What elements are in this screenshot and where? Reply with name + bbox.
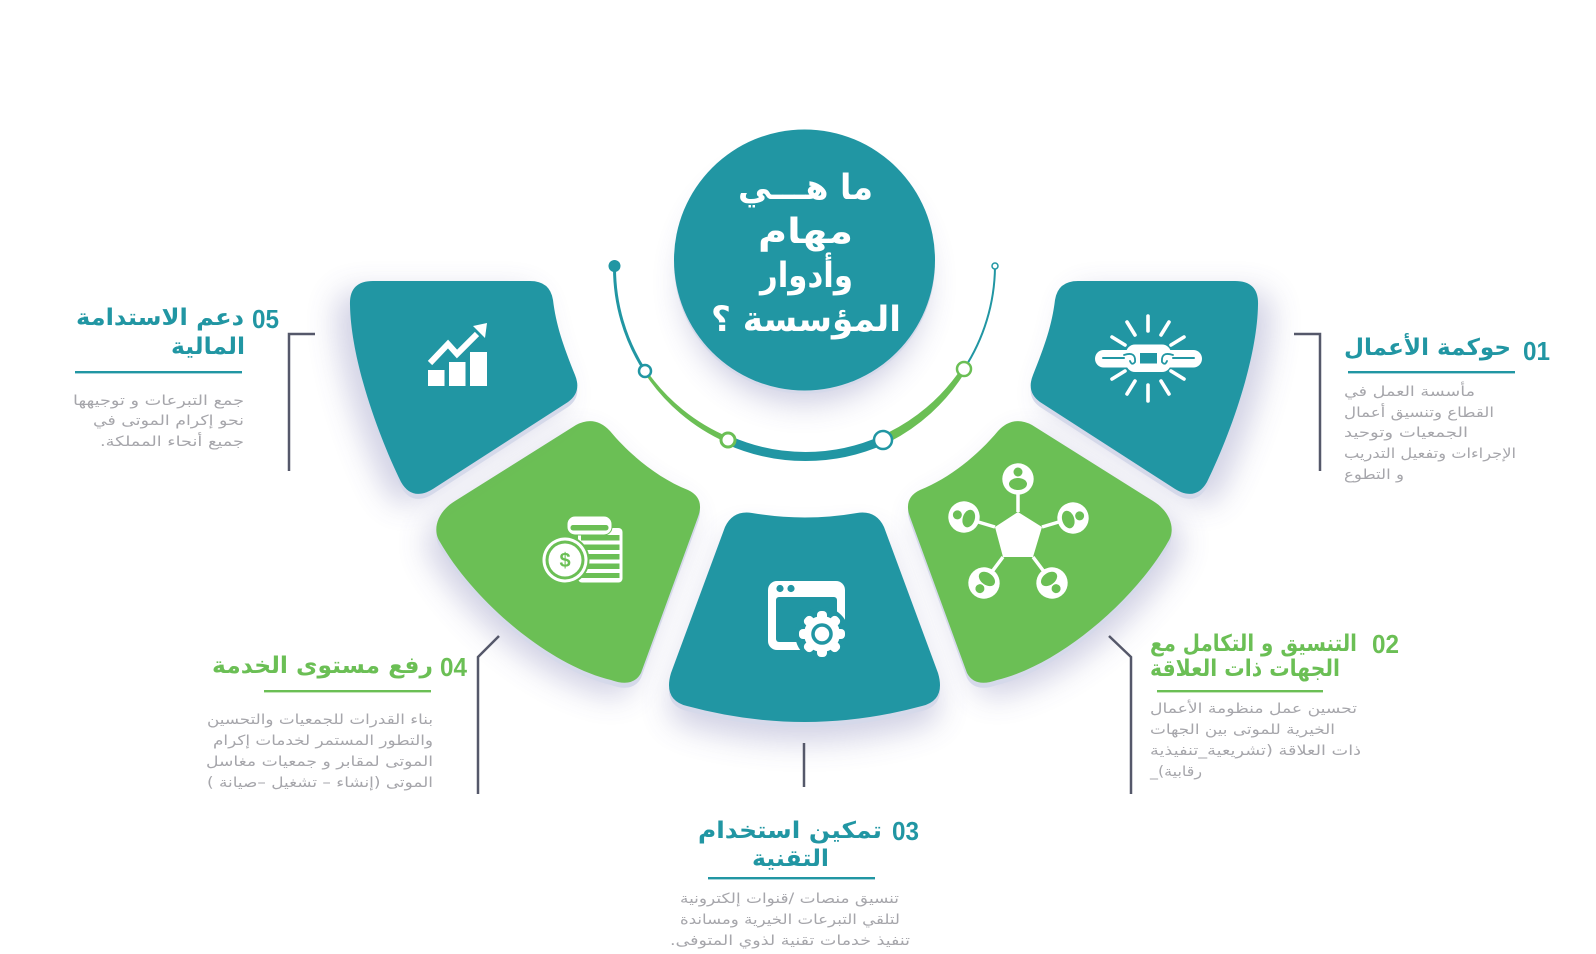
connector 03 — [803, 743, 805, 787]
underline 05 — [75, 371, 242, 373]
arc with nodes — [608, 260, 998, 457]
description 03: تنسيق منصات /قنوات إلكترونية — [680, 891, 899, 907]
icon: coins with dollar: $ — [559, 550, 571, 572]
panel: teal shape 01 — [1031, 281, 1272, 504]
title 01: حوكمة الأعمال — [1344, 332, 1511, 361]
heading: central question: المؤسسة ؟ — [711, 300, 901, 340]
panel: green shape 02 — [908, 421, 1182, 697]
number 01: 01 — [1523, 336, 1550, 366]
text block 04 — [206, 652, 468, 791]
description 05: جميع أنحاء المملكة. — [100, 432, 244, 450]
title 02: الجهات ذات العلاقة — [1150, 656, 1340, 682]
title 04: رفع مستوى الخدمة — [212, 653, 433, 679]
underline 04 — [264, 690, 431, 692]
icon: network of people — [944, 463, 1093, 605]
text block 05 — [73, 304, 279, 450]
icon: window with gear — [768, 581, 849, 661]
title 05: دعم الاستدامة — [76, 305, 244, 331]
heading: central question: وأدوار — [758, 252, 853, 296]
description 04: الموتى لمقابر و جمعيات مغاسل — [206, 754, 433, 770]
description 04: والتطور المستمر لخدمات إكرام — [213, 733, 433, 749]
description 01: مأسسة العمل في — [1344, 381, 1475, 400]
title 02: التنسيق و التكامل مع — [1150, 631, 1357, 657]
panel: green shape 04 — [426, 421, 700, 697]
description 01: و التطوع — [1344, 467, 1404, 483]
description 05 — [73, 393, 244, 450]
panel: teal shape 03 — [669, 513, 940, 742]
description 02 — [1149, 699, 1361, 780]
title 03 — [698, 818, 882, 872]
connector 05 — [289, 334, 315, 471]
description 03: تنفيذ خدمات تقنية لذوي المتوفى. — [670, 933, 910, 949]
text block 03 — [670, 816, 919, 949]
description 04: بناء القدرات للجمعيات والتحسين — [207, 712, 433, 728]
description 01: الجمعيات وتوحيد — [1344, 425, 1468, 441]
description 03 — [670, 891, 910, 949]
title 03: تمكين استخدام — [698, 818, 882, 844]
description 01: الإجراءات وتفعيل التدريب — [1344, 446, 1516, 462]
heading: central question: ما هـــي — [738, 168, 873, 208]
connector 02 — [1109, 636, 1131, 794]
description 02: الخيرية للموتى بين الجهات — [1150, 722, 1335, 738]
heading: central question: مهام — [758, 212, 853, 252]
text block 02 — [1149, 629, 1399, 780]
icon: broken chain — [1095, 316, 1202, 401]
underline 02 — [1157, 690, 1323, 692]
icon: rising chart — [428, 323, 487, 386]
title 03: التقنية — [752, 846, 829, 872]
number 05: 05 — [252, 304, 279, 334]
number 04: 04 — [440, 652, 468, 682]
connector 01 — [1294, 334, 1320, 471]
description 02: تحسين عمل منظومة الأعمال — [1150, 699, 1357, 717]
title 02 — [1150, 631, 1357, 682]
description 01 — [1344, 381, 1516, 483]
description 01: القطاع وتنسيق أعمال — [1344, 403, 1494, 421]
panel: teal shape 05 — [336, 281, 577, 504]
heading: central question — [711, 168, 901, 340]
description 05: جمع التبرعات و توجيهها — [73, 393, 244, 409]
description 02: ذات العلاقة (تشريعية_تنفيذية — [1150, 743, 1361, 759]
icon: coins with dollar — [540, 516, 622, 584]
description 04: الموتى (إنشاء – تشغيل –صيانة ) — [207, 775, 433, 791]
description 02: رقابية)_ — [1149, 764, 1202, 780]
title 05 — [76, 305, 245, 360]
description 03: لتلقي التبرعات الخيرية ومساندة — [680, 912, 900, 928]
underline 03 — [708, 877, 875, 879]
description 05: نحو إكرام الموتى في — [93, 413, 244, 429]
number 02: 02 — [1372, 629, 1399, 659]
title 05: المالية — [171, 334, 245, 360]
underline 01 — [1348, 371, 1515, 373]
panel: central circle — [674, 130, 935, 404]
description 04 — [206, 712, 433, 791]
number 03: 03 — [892, 816, 919, 846]
connector 04 — [478, 636, 499, 794]
text block 01 — [1344, 332, 1550, 483]
